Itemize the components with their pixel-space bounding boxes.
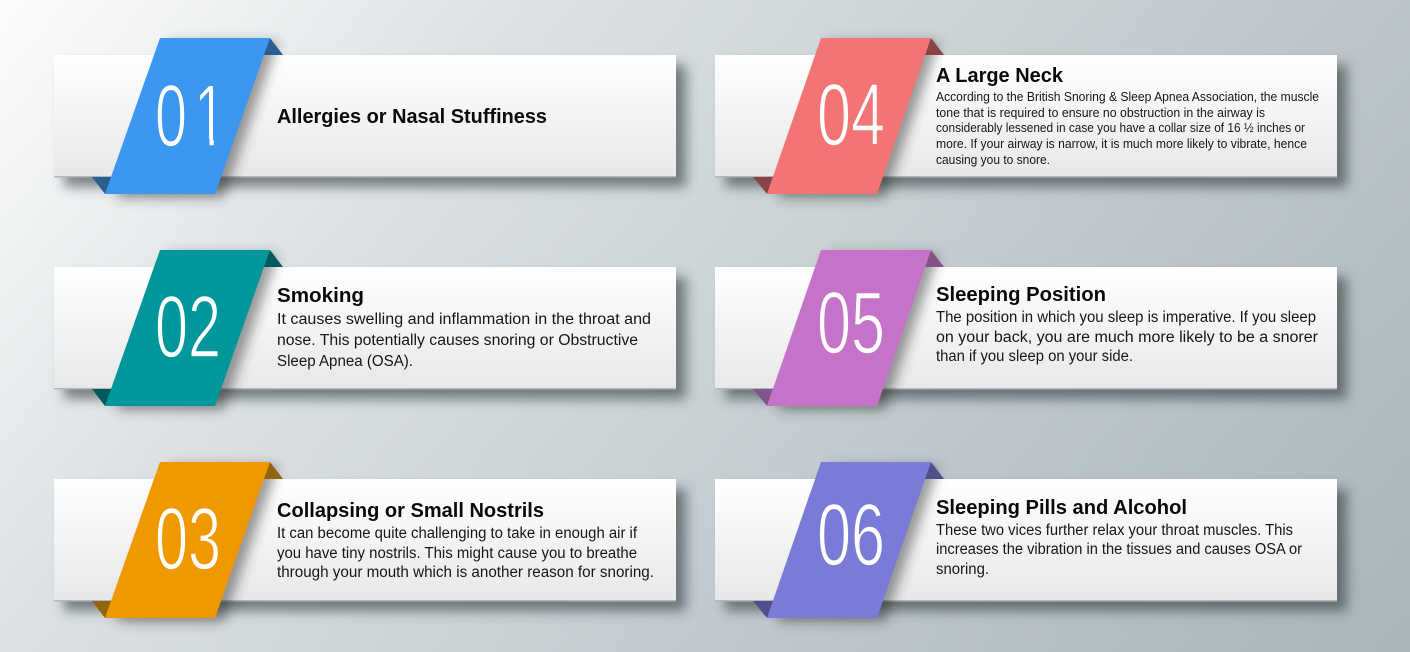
body 04: According to the British Snoring & Sleep Apnea Association, the muscle [936,90,1319,104]
ribbon 06 [767,462,931,618]
ribbon 02 [105,250,270,406]
body 04 [936,90,1319,167]
number 05: 05 [817,273,885,372]
panel 06: pills and alcohol [715,462,1347,622]
body 06: These two vices further relax your throat muscles. This [936,522,1293,539]
heading 06: Sleeping Pills and Alcohol [936,497,1187,519]
panel 02: smoking [54,250,686,410]
panel 03: nostrils [54,462,686,622]
heading 01: Allergies or Nasal Stuffiness [277,106,547,128]
body 04: causing you to snore. [936,153,1050,167]
panel 05: sleeping position [715,250,1347,410]
number 06: 06 [817,485,885,584]
body 02: Sleep Apnea (OSA). [277,353,413,370]
body 05: on your back, you are much more likely to be a snorer [936,329,1318,346]
body 02: nose. This potentially causes snoring or Obstructive [277,332,638,349]
body 05: The position in which you sleep is imperative. If you sleep [936,309,1316,326]
body 03: It can become quite challenging to take in enough air if [277,525,638,542]
heading 02: Smoking [277,285,364,307]
body 03: you have tiny nostrils. This might cause you to breathe [277,545,637,562]
number 01: 0 [155,66,187,165]
heading 05: Sleeping Position [936,284,1106,306]
number 04: 04 [817,65,885,164]
ribbon 03 [105,462,270,618]
body 02 [277,311,651,370]
body 03: through your mouth which is another reason for snoring. [277,564,654,581]
panel 04: large neck [715,38,1347,198]
ribbon 04 [767,38,931,194]
ribbon 05 [767,250,931,406]
body 04: more. If your airway is narrow, it is much more likely to vibrate, hence [936,137,1307,151]
ribbon 01 [105,38,270,194]
body 06: snoring. [936,561,989,578]
body 02: It causes swelling and inflammation in the throat and [277,311,651,328]
heading 04: A Large Neck [936,65,1064,87]
body 05: than if you sleep on your side. [936,348,1133,365]
panel 01: allergies [54,38,686,198]
number 01 [155,66,226,165]
body 06: increases the vibration in the tissues and causes OSA or [936,541,1302,558]
body 04: tone that is required to ensure no obstruction in the airway is [936,106,1265,120]
body 06 [936,522,1302,578]
number 01: 1 [194,66,226,165]
body 03 [277,525,654,581]
number 03: 03 [155,489,221,588]
number 02: 02 [155,277,221,376]
heading 03: Collapsing or Small Nostrils [277,500,544,522]
body 05 [936,309,1318,365]
body 04: considerably lessened in case you have a collar size of 16 ½ inches or [936,121,1305,135]
